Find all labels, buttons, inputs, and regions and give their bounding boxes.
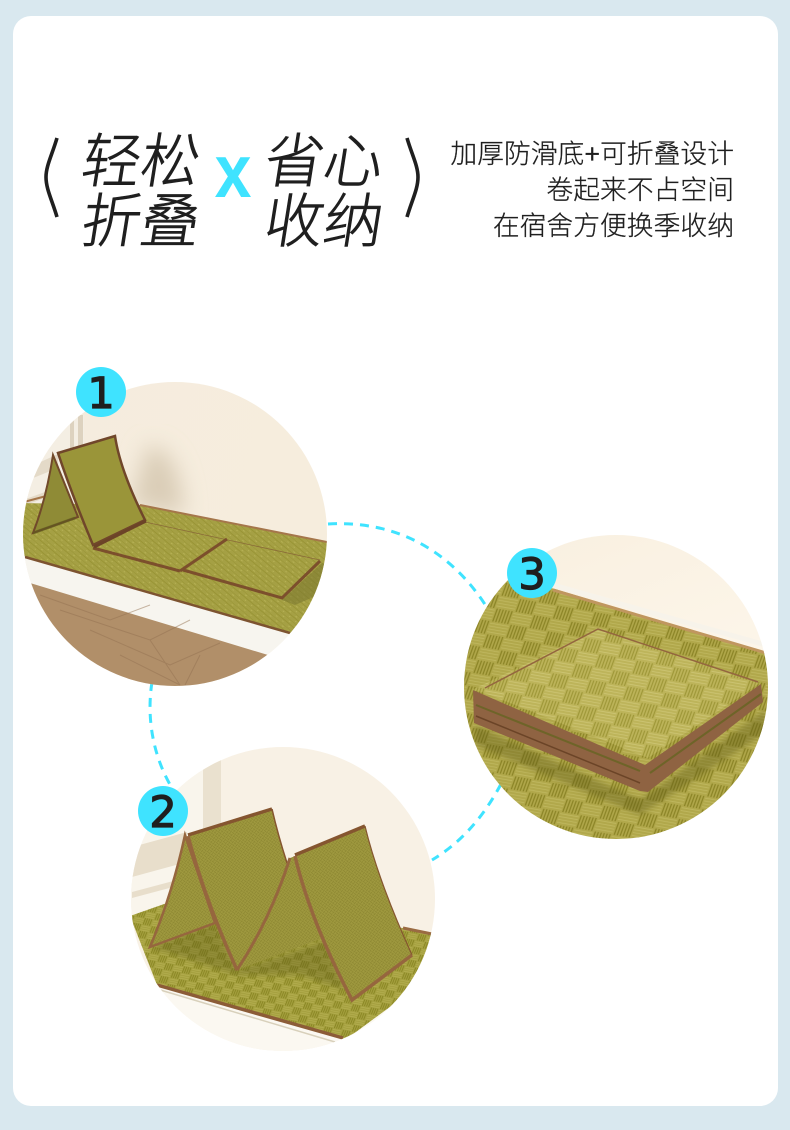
white bench bbox=[160, 988, 388, 1051]
first tent fold bbox=[150, 809, 300, 970]
window frame bbox=[20, 415, 84, 505]
tatami base mat bbox=[130, 903, 440, 1040]
step 2 photo: two folds standing bbox=[125, 745, 440, 1060]
badge 3 bbox=[507, 548, 557, 600]
badge 3: 3 bbox=[518, 550, 546, 600]
wood floor bbox=[31, 583, 268, 686]
tatami base mat bbox=[20, 503, 330, 634]
second tent fold bbox=[237, 826, 412, 1000]
cyan x symbol: x bbox=[215, 130, 251, 214]
badge 2 bbox=[138, 786, 188, 838]
wall bbox=[20, 380, 330, 690]
step 1 photo: one fold raised bbox=[20, 380, 330, 690]
wall bbox=[546, 535, 764, 650]
badge 1: 1 bbox=[87, 369, 115, 419]
description text block: 在宿舍方便换季收纳 bbox=[493, 211, 734, 241]
flat fold panels bbox=[93, 522, 320, 598]
description text block: 卷起来不占空间 bbox=[546, 175, 734, 205]
raised tent fold bbox=[33, 436, 146, 547]
wall bbox=[133, 747, 435, 982]
description text block: 加厚防滑底+可折叠设计 bbox=[450, 139, 734, 169]
step 3 photo: fully folded stack bbox=[460, 530, 775, 845]
heading: 轻松折叠 bbox=[77, 128, 205, 255]
white bench bbox=[25, 558, 289, 654]
heading: 轻松折叠: 折叠 bbox=[77, 188, 205, 255]
heading: 省心收纳 bbox=[260, 128, 388, 255]
window frame bbox=[125, 745, 210, 920]
baseboard bbox=[553, 585, 766, 645]
description text block bbox=[450, 139, 734, 241]
heading: 省心收纳: 收纳 bbox=[260, 188, 388, 255]
folded stack bbox=[472, 629, 763, 792]
floor shadows bbox=[150, 923, 345, 990]
badge 2: 2 bbox=[149, 788, 177, 838]
stack shadow bbox=[475, 710, 770, 815]
badge 1 bbox=[76, 367, 126, 419]
tatami floor bbox=[464, 580, 768, 839]
heading: 轻松折叠: 轻松 bbox=[77, 128, 205, 195]
title: 轻松折叠 x 省心收纳 bbox=[46, 128, 418, 255]
right brace bbox=[407, 138, 418, 217]
heading: 省心收纳: 省心 bbox=[260, 128, 388, 195]
dashed connectors between steps bbox=[150, 524, 501, 860]
left brace bbox=[46, 138, 57, 217]
